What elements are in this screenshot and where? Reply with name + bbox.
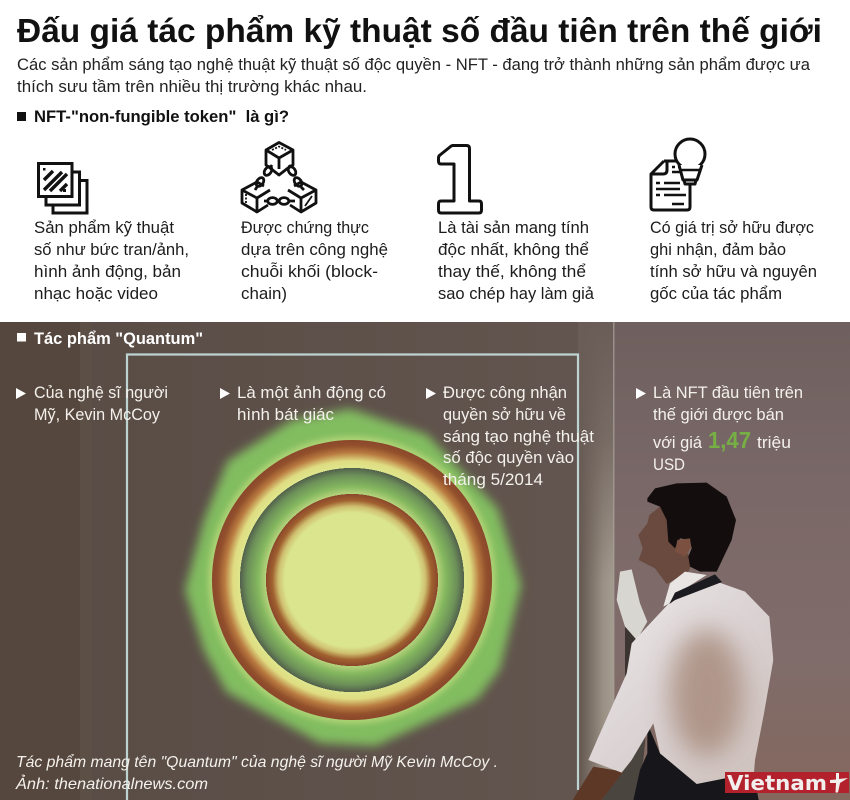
hair xyxy=(647,483,736,572)
title: Đấu giá tác phẩm kỹ thuật số đầu tiên trên thế giới xyxy=(17,12,822,49)
caption xyxy=(15,753,498,793)
fact: first NFT sold, price xyxy=(636,384,803,474)
dark gap beside body xyxy=(625,627,637,680)
fact: first NFT sold, price: 1,47 xyxy=(708,427,751,453)
column: ownership: Có giá trị sở hữu được xyxy=(650,219,814,237)
fact: ownership recognised xyxy=(426,384,594,489)
column: unique: Là tài sản mang tính xyxy=(438,219,589,237)
column: ownership: tính sở hữu và nguyên xyxy=(650,263,817,281)
face and neck xyxy=(638,507,693,584)
projection frame xyxy=(127,354,578,800)
column: blockchain: chuỗi khối (block- xyxy=(241,262,378,281)
fact: first NFT sold, price: triệu xyxy=(757,434,791,452)
fact: ownership recognised: số độc quyền vào xyxy=(443,449,574,467)
icon: layered artwork xyxy=(38,164,87,213)
fact: first NFT sold, price: Là NFT đầu tiên trên xyxy=(653,384,803,402)
fact: ownership recognised: sáng tạo nghệ thuật xyxy=(443,428,594,446)
fact: first NFT sold, price: thế giới được bán xyxy=(653,406,784,424)
column: digital product: số như bức tran/ảnh, xyxy=(34,241,189,259)
heading: what is NFT: NFT-"non-fungible token" là gì? xyxy=(34,108,289,126)
column: unique xyxy=(438,219,595,303)
collar xyxy=(663,572,707,607)
column: unique: sao chép hay làm giả xyxy=(438,285,595,303)
column: blockchain: Được chứng thực xyxy=(241,219,369,237)
intro text xyxy=(17,56,811,96)
logo: Vietnam+: Vietnam xyxy=(727,771,827,795)
fact: ownership recognised: quyền sở hữu về xyxy=(443,406,566,424)
column: blockchain xyxy=(241,219,388,303)
column: ownership xyxy=(650,219,817,303)
column: ownership: ghi nhận, đảm bảo xyxy=(650,241,786,259)
artwork: concentric rings xyxy=(212,440,492,720)
forearm xyxy=(573,767,623,800)
column: digital product xyxy=(34,219,189,303)
panel: photo of Quantum xyxy=(0,322,850,800)
column: digital product: nhạc hoặc video xyxy=(34,285,158,303)
heading: Quantum: Tác phẩm "Quantum" xyxy=(34,330,203,348)
fact: animated octagon xyxy=(220,384,386,424)
column: unique: thay thế, không thể xyxy=(438,263,586,281)
fact: animated octagon: Là một ảnh động có xyxy=(237,384,386,402)
fact: ownership recognised: tháng 5/2014 xyxy=(443,471,543,489)
intro text: thích sưu tầm trên nhiều thị trường khác nhau. xyxy=(17,78,367,96)
column: ownership: gốc của tác phẩm xyxy=(650,285,782,303)
caption: Tác phẩm mang tên "Quantum" của nghệ sĩ người Mỹ Kevin McCoy . xyxy=(16,753,498,771)
column: digital product: Sản phẩm kỹ thuật xyxy=(34,219,174,237)
shirt xyxy=(588,582,774,784)
fact: ownership recognised: Được công nhận xyxy=(443,384,567,402)
apron strap xyxy=(669,574,722,604)
fact: first NFT sold, price: với giá xyxy=(653,434,703,452)
column: unique: độc nhất, không thể xyxy=(438,241,589,259)
icon: document and light bulb xyxy=(651,139,705,210)
glove xyxy=(617,569,647,640)
artwork: octagonal green glow xyxy=(188,412,518,743)
ear xyxy=(675,538,691,557)
column: digital product: hình ảnh động, bản xyxy=(34,263,181,281)
fact: artist xyxy=(16,384,168,424)
fact: artist: Của nghệ sĩ người xyxy=(34,384,168,402)
icon: blockchain cubes xyxy=(242,142,316,212)
column: blockchain: dựa trên công nghệ xyxy=(241,241,388,259)
shadow below arm xyxy=(602,720,647,800)
icon: number one xyxy=(438,146,482,213)
caption: Ảnh: thenationalnews.com xyxy=(15,774,208,793)
fact: first NFT sold, price: USD xyxy=(653,456,685,474)
fact: artist: Mỹ, Kevin McCoy xyxy=(34,406,161,424)
man looking at artwork xyxy=(573,483,780,800)
fact: animated octagon: hình bát giác xyxy=(237,406,334,424)
apron xyxy=(633,723,759,800)
intro text: Các sản phẩm sáng tạo nghệ thuật kỹ thuật số độc quyền - NFT - đang trở thành những sản phẩm được ưa xyxy=(17,56,811,74)
column: blockchain: chain) xyxy=(241,285,287,303)
